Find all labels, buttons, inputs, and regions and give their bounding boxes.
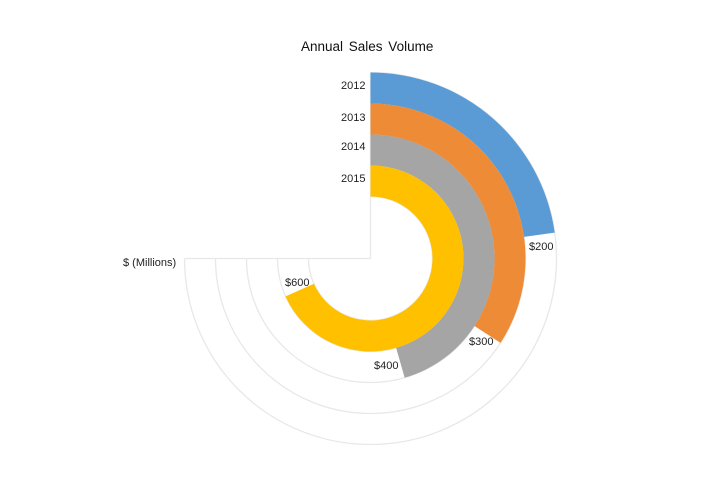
year labels: 2014 — [341, 141, 365, 153]
value labels: $600 — [285, 277, 309, 289]
year labels: 2013 — [341, 112, 365, 124]
bar: 2014 — [370, 134, 495, 378]
value labels — [285, 241, 553, 372]
value labels: $200 — [529, 241, 553, 253]
value labels: $300 — [469, 336, 493, 348]
bar: 2015 — [286, 166, 463, 352]
radial bar chart — [184, 72, 556, 444]
value labels: $400 — [374, 360, 398, 372]
chart grid rings — [184, 72, 556, 444]
bar: 2013 — [370, 104, 526, 343]
year labels: 2015 — [341, 173, 365, 185]
axis unit label: $ (Millions) — [123, 257, 176, 269]
bar: 2012 — [370, 72, 555, 237]
year labels — [341, 80, 365, 185]
year labels: 2012 — [341, 80, 365, 92]
title: Annual Sales Volume — [301, 39, 433, 54]
